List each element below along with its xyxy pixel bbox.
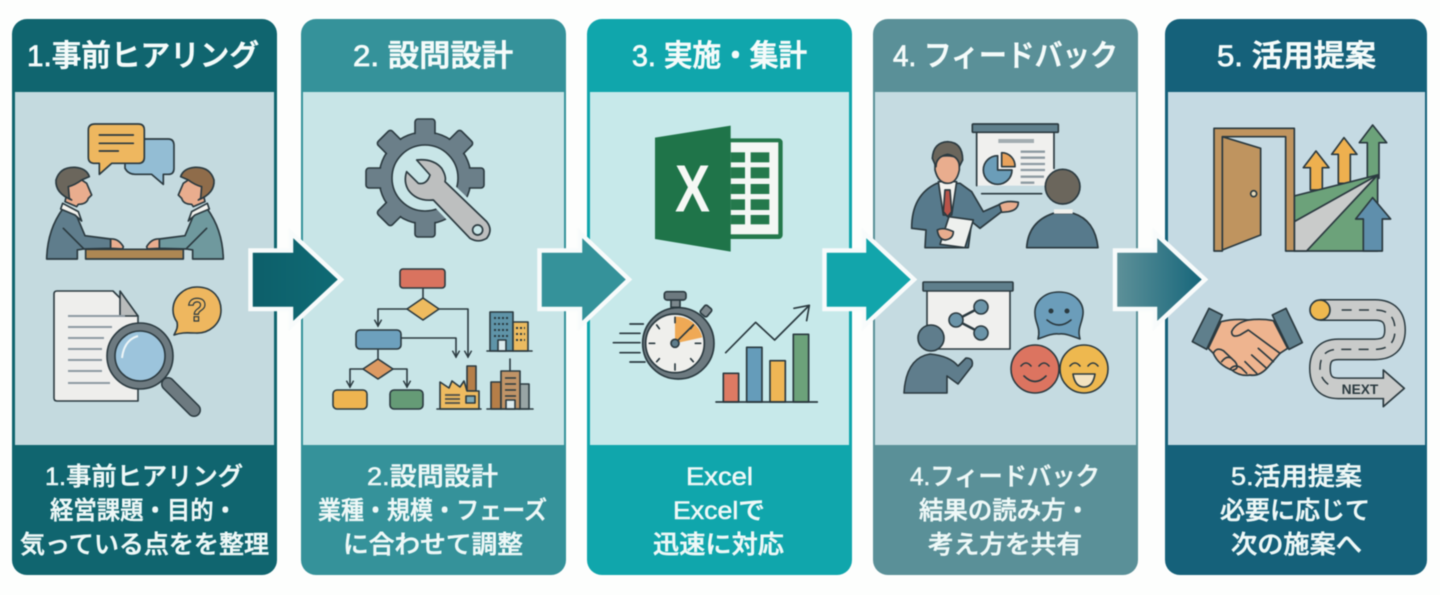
icon: presenter with chart — [912, 124, 1098, 248]
icon: Excel logo: X — [675, 153, 710, 227]
blue speech bubble — [125, 139, 174, 184]
step 3 description — [653, 463, 784, 559]
icon: winding road NEXT — [1310, 300, 1404, 407]
icon: handshake — [1192, 308, 1302, 375]
icon: smiling faces — [1011, 292, 1108, 393]
step 2 description: 2.設問設計 — [367, 463, 498, 491]
icon: stopwatch — [613, 292, 714, 379]
step 3 description: Excel — [686, 463, 753, 491]
panel: step 1 — [12, 19, 277, 575]
door frame — [1214, 128, 1294, 251]
arrow 4 to 5 — [1115, 233, 1205, 326]
step 5 description: 5.活用提案 — [1231, 463, 1362, 491]
panel 2 illustration area — [303, 92, 564, 445]
road landscape — [1294, 175, 1378, 251]
left person — [47, 167, 123, 259]
icon: open door with growth arrows — [1214, 125, 1391, 251]
table — [86, 249, 183, 259]
icon: winding road NEXT: NEXT — [1342, 381, 1379, 397]
step 1 description: 気っている点をを整理 — [20, 531, 269, 559]
step 4 description: 結果の読み方・ — [919, 497, 1090, 525]
panel: step 4 — [873, 19, 1138, 575]
step 3 description: Excelで — [673, 497, 765, 525]
heading 2: 2. 設問設計 — [353, 40, 513, 73]
document — [54, 291, 138, 401]
presentation board — [972, 124, 1058, 194]
person at board — [904, 325, 972, 393]
magnifier lens — [107, 323, 173, 389]
arrow 3 to 4 — [824, 233, 914, 326]
magnifier handle — [168, 384, 194, 410]
panel: step 3 — [587, 19, 852, 575]
step 2 description: 業種・規模・フェーズ — [318, 497, 547, 525]
heading 5: 5. 活用提案 — [1217, 40, 1376, 73]
icon: Excel logo — [655, 126, 783, 252]
heading 4: 4. フィードバック — [893, 40, 1118, 73]
panel 3 illustration area — [590, 92, 849, 445]
step 4 description: 考え方を共有 — [928, 531, 1082, 559]
panel: step 2 — [301, 19, 566, 575]
arrow 2 to 3 — [540, 233, 629, 326]
icon: tower — [487, 359, 533, 409]
panel: step 5 — [1165, 19, 1427, 575]
step 1 description: 1.事前ヒアリング — [45, 463, 243, 491]
question bubble: ? — [187, 292, 207, 328]
step 5 description — [1220, 463, 1370, 559]
icon: office buildings — [487, 312, 532, 351]
step 2 description: に合わせて調整 — [343, 531, 523, 559]
panel 4 illustration area — [875, 92, 1136, 445]
door — [1222, 137, 1261, 250]
yellow speech bubble — [88, 124, 144, 174]
heading 3: 3. 実施・集計 — [632, 40, 807, 73]
question bubble — [173, 287, 221, 335]
icon: gear and wrench — [366, 119, 490, 241]
step 4 description — [910, 463, 1100, 559]
panel 5 illustration area — [1168, 92, 1425, 445]
heading 1: 1.事前ヒアリング — [27, 40, 259, 73]
presenter — [912, 142, 1018, 248]
arrows rising — [1359, 125, 1387, 178]
icon: document with magnifier — [54, 287, 221, 410]
listener — [1027, 169, 1098, 248]
icon: conversation — [47, 124, 223, 259]
step 5 description: 必要に応じて — [1220, 497, 1370, 525]
arrow 1 to 2 — [250, 233, 341, 326]
bubble lines — [99, 135, 133, 151]
step 1 description: 経営課題・目的・ — [50, 497, 237, 525]
panel 1 illustration area — [15, 92, 274, 445]
step 1 description — [20, 463, 269, 559]
right person — [147, 167, 223, 259]
icon: share board — [904, 282, 1013, 393]
icon: rising bar chart — [716, 305, 817, 402]
step 4 description: 4.フィードバック — [910, 463, 1100, 491]
step 2 description — [318, 463, 547, 559]
step 3 description: 迅速に対応 — [653, 531, 784, 559]
step 5 description: 次の施案へ — [1231, 531, 1362, 559]
icon: factory — [437, 366, 481, 409]
icon: flowchart — [333, 269, 468, 409]
